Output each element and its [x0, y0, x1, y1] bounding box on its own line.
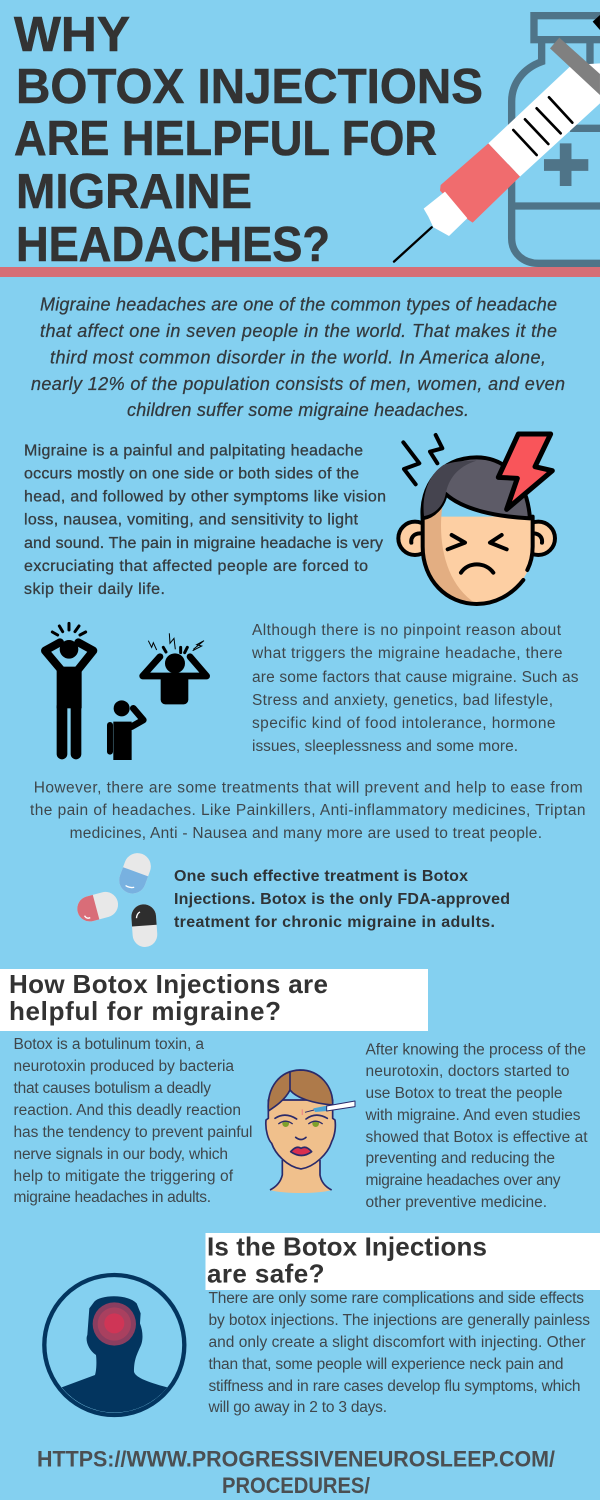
title — [14, 8, 483, 272]
paragraph: triggers: what triggers the migraine headache, there — [251, 645, 562, 662]
paragraph: doctors use botox: with migraine. And even studies — [364, 1107, 581, 1124]
paragraph: triggers: are some factors that cause migraine. Such as — [252, 669, 579, 686]
intro text: nearly 12% of the population consists of men, women, and even — [31, 374, 565, 394]
paragraph: triggers: specific kind of food intolerance, hormone — [252, 715, 556, 732]
intro text: that affect one in seven people in the world. That makes it the — [40, 321, 557, 341]
paragraph: what is migraine: excruciating that affected people are forced to — [24, 558, 368, 575]
title: ARE HELPFUL FOR — [14, 112, 437, 166]
paragraph: botulinum toxin: Botox is a botulinum toxin, a — [14, 1036, 204, 1053]
callout: botox treatment — [174, 868, 510, 931]
icon: syringe — [394, 15, 600, 262]
paragraph: what is migraine: skip their daily life. — [24, 581, 165, 598]
paragraph: triggers — [251, 622, 579, 755]
icon: head with pain focus — [44, 1275, 184, 1415]
heading: is botox safe: are safe? — [207, 1259, 324, 1289]
paragraph: doctors use botox: showed that Botox is effective at — [366, 1129, 588, 1146]
paragraph: what is migraine: and sound. The pain in migraine headache is very — [24, 535, 383, 552]
callout: botox treatment: treatment for chronic migraine in adults. — [174, 914, 495, 931]
paragraph: safety: will go away in 2 to 3 days. — [208, 1399, 387, 1416]
heading: is botox safe: Is the Botox Injections — [207, 1232, 487, 1262]
paragraph: botulinum toxin: help to mitigate the triggering of — [14, 1168, 234, 1185]
paragraph: what is migraine — [24, 442, 386, 598]
paragraph: doctors use botox: After knowing the process of the — [366, 1042, 586, 1058]
heading: how botox helps: How Botox Injections are — [9, 969, 328, 999]
paragraph: what is migraine: Migraine is a painful and palpitating headache — [24, 442, 363, 460]
icon: stressed people — [45, 623, 207, 760]
title underline bar — [0, 267, 600, 277]
paragraph: safety: than that, some people will experience neck pain and — [208, 1356, 564, 1373]
paragraph: safety — [208, 1290, 590, 1416]
paragraph: doctors use botox: other preventive medicine. — [366, 1194, 547, 1211]
paragraph: treatments: However, there are some treatments that will prevent and help to ease from — [34, 780, 583, 797]
paragraph: safety: by botox injections. The injections are generally painless — [208, 1312, 590, 1329]
heading: is botox safe — [206, 1232, 600, 1290]
footer url — [37, 1447, 555, 1498]
footer url: PROCEDURES/ — [222, 1473, 370, 1498]
title: MIGRAINE — [16, 165, 252, 219]
paragraph: safety: and only create a slight discomfort with injecting. Other — [208, 1334, 586, 1351]
title: WHY — [14, 8, 130, 62]
paragraph: what is migraine: head, and followed by other symptoms like vision — [24, 489, 386, 506]
paragraph: botulinum toxin: neurotoxin produced by bacteria — [14, 1058, 234, 1075]
heading: how botox helps — [0, 969, 428, 1031]
title: BOTOX INJECTIONS — [16, 60, 483, 114]
paragraph: botulinum toxin: that causes botulism a deadly — [14, 1080, 211, 1097]
icon: medicine bottle — [512, 16, 600, 263]
paragraph: what is migraine: loss, nausea, vomiting, and sensitivity to light — [24, 512, 359, 529]
icon: pills — [74, 849, 158, 948]
paragraph: botulinum toxin: has the tendency to prevent painful — [14, 1124, 252, 1141]
paragraph: doctors use botox: neurotoxin, doctors started to — [366, 1063, 570, 1080]
paragraph: botulinum toxin — [14, 1036, 252, 1206]
paragraph: safety: There are only some rare complications and side effects — [208, 1290, 584, 1307]
heading: how botox helps: helpful for migraine? — [9, 996, 281, 1026]
icon: head with migraine — [398, 434, 555, 604]
paragraph: doctors use botox: preventing and reducing the — [366, 1150, 555, 1167]
intro text: Migraine headaches are one of the common types of headache — [40, 294, 557, 314]
paragraph: treatments: medicines, Anti - Nausea and many more are used to treat people. — [70, 825, 542, 842]
paragraph: doctors use botox: use Botox to treat the people — [366, 1085, 562, 1102]
paragraph: doctors use botox — [364, 1042, 588, 1211]
paragraph: what is migraine: occurs mostly on one side or both sides of the — [24, 466, 359, 482]
paragraph: treatments — [30, 780, 586, 842]
callout: botox treatment: One such effective treatment is Botox — [174, 868, 468, 885]
icon: woman receiving injection — [266, 1070, 355, 1193]
paragraph: triggers: Stress and anxiety, genetics, bad lifestyle, — [252, 692, 553, 709]
paragraph: botulinum toxin: reaction. And this deadly reaction — [14, 1102, 241, 1119]
intro text: children suffer some migraine headaches. — [127, 400, 469, 420]
intro text: third most common disorder in the world. In America alone, — [50, 348, 546, 368]
footer url: HTTPS://WWW.PROGRESSIVENEUROSLEEP.COM/ — [37, 1447, 555, 1472]
paragraph: botulinum toxin: migraine headaches in adults. — [14, 1189, 211, 1206]
intro text — [31, 294, 565, 420]
paragraph: triggers: issues, sleeplessness and some more. — [252, 738, 518, 755]
paragraph: botulinum toxin: nerve signals in our body, which — [14, 1146, 228, 1163]
paragraph: treatments: the pain of headaches. Like Painkillers, Anti-inflammatory medicines, Triptan — [30, 802, 586, 819]
title: HEADACHES? — [16, 218, 330, 272]
paragraph: doctors use botox: migraine headaches over any — [366, 1172, 561, 1189]
paragraph: triggers: Although there is no pinpoint reason about — [252, 622, 562, 639]
callout: botox treatment: Injections. Botox is the only FDA-approved — [174, 891, 510, 908]
paragraph: safety: stiffness and in rare cases develop flu symptoms, which — [208, 1378, 580, 1395]
